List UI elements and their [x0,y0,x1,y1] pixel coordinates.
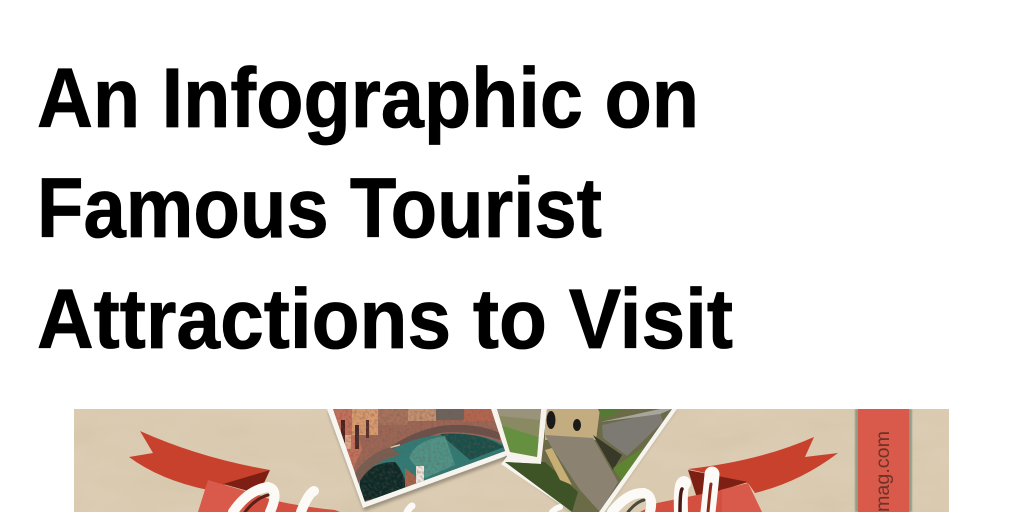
script heading fragment [233,474,712,512]
title: An Infographic on [37,51,699,145]
infographic image preview [74,405,949,512]
photo grain [333,409,505,502]
title [37,51,733,366]
photo: Great Wall [500,405,680,512]
left ribbon [129,431,270,512]
side tab url text: mag.com [873,431,894,512]
right ribbon [688,437,838,512]
paper background [74,409,949,512]
photo: green landscape [495,409,543,457]
photo: Venice canal [325,405,515,511]
title: Attractions to Visit [37,272,733,366]
ribbon centre band [245,490,722,512]
title: Famous Tourist [37,161,602,255]
side tab [855,409,912,512]
